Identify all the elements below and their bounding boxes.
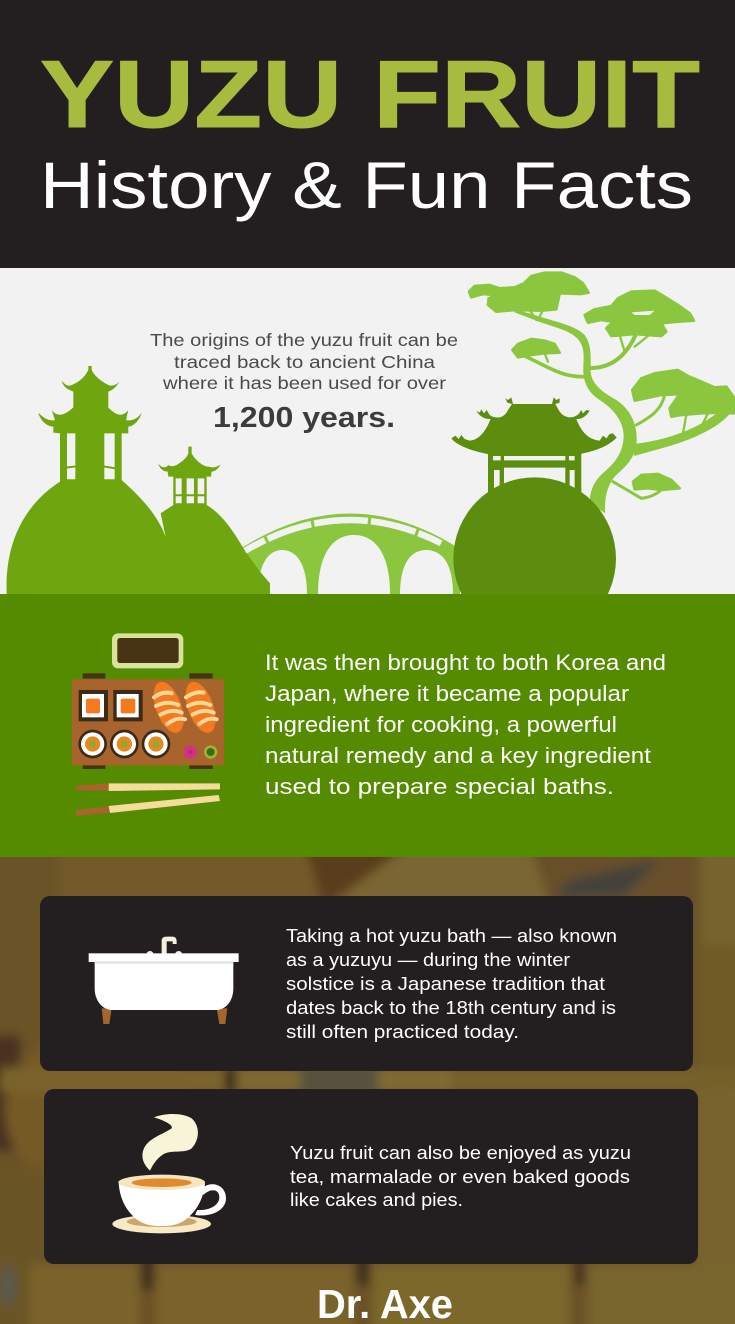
panel: origins in ancient China (0, 268, 735, 640)
background: blurred yuzu fruit photo (0, 845, 735, 1324)
text: brought to Korea and Japan (265, 650, 666, 799)
text: brought to Korea and Japan: ingredient for cooking, a powerful (265, 712, 617, 737)
icon: bathtub (89, 937, 239, 1024)
icon: cup of yuzu tea (112, 1114, 226, 1233)
text: yuzu tea and foods (290, 1143, 631, 1210)
text: yuzu bath tradition (286, 926, 617, 1042)
panel: Korea and Japan (0, 594, 735, 857)
illustration: left pagodas on hills (7, 366, 270, 594)
origins text: traced back to ancient China (174, 352, 435, 372)
text: yuzu tea and foods: tea, marmalade or even baked goods (290, 1167, 630, 1187)
text: brought to Korea and Japan: used to prepare special baths. (265, 774, 614, 799)
text: brought to Korea and Japan: It was then brought to both Korea and (265, 650, 666, 675)
text: yuzu tea and foods: like cakes and pies. (290, 1190, 463, 1210)
icon: sushi tray and chopsticks (72, 633, 224, 816)
panel: yuzu foods (44, 1089, 698, 1264)
text: yuzu bath tradition: as a yuzuyu — during the winter (286, 950, 570, 970)
origins text: The origins of the yuzu fruit can be (150, 330, 458, 350)
text: yuzu bath tradition: Taking a hot yuzu bath — also known (286, 926, 617, 946)
illustration: arched bridge (240, 514, 460, 594)
text: yuzu bath tradition: solstice is a Japanese tradition that (286, 974, 605, 994)
header panel (0, 0, 735, 268)
illustration: bonsai tree (469, 273, 735, 513)
origins text: where it has been used for over (162, 373, 446, 393)
title: Yuzu Fruit: YUZU FRUIT (40, 41, 700, 148)
text: brought to Korea and Japan: natural remedy and a key ingredient (265, 743, 651, 768)
panel: yuzu bath (40, 896, 693, 1071)
subtitle: History & Fun Facts (40, 148, 693, 222)
illustration: right pagoda on hill (451, 397, 617, 640)
text: brought to Korea and Japan: Japan, where it became a popular (265, 681, 629, 706)
text: yuzu tea and foods: Yuzu fruit can also be enjoyed as yuzu (290, 1143, 631, 1163)
text: yuzu bath tradition: still often practiced today. (286, 1022, 519, 1042)
origins text (150, 330, 458, 393)
highlighted figure: 1,200 years: 1,200 years. (213, 402, 395, 434)
text: yuzu bath tradition: dates back to the 18th century and is (286, 998, 616, 1018)
